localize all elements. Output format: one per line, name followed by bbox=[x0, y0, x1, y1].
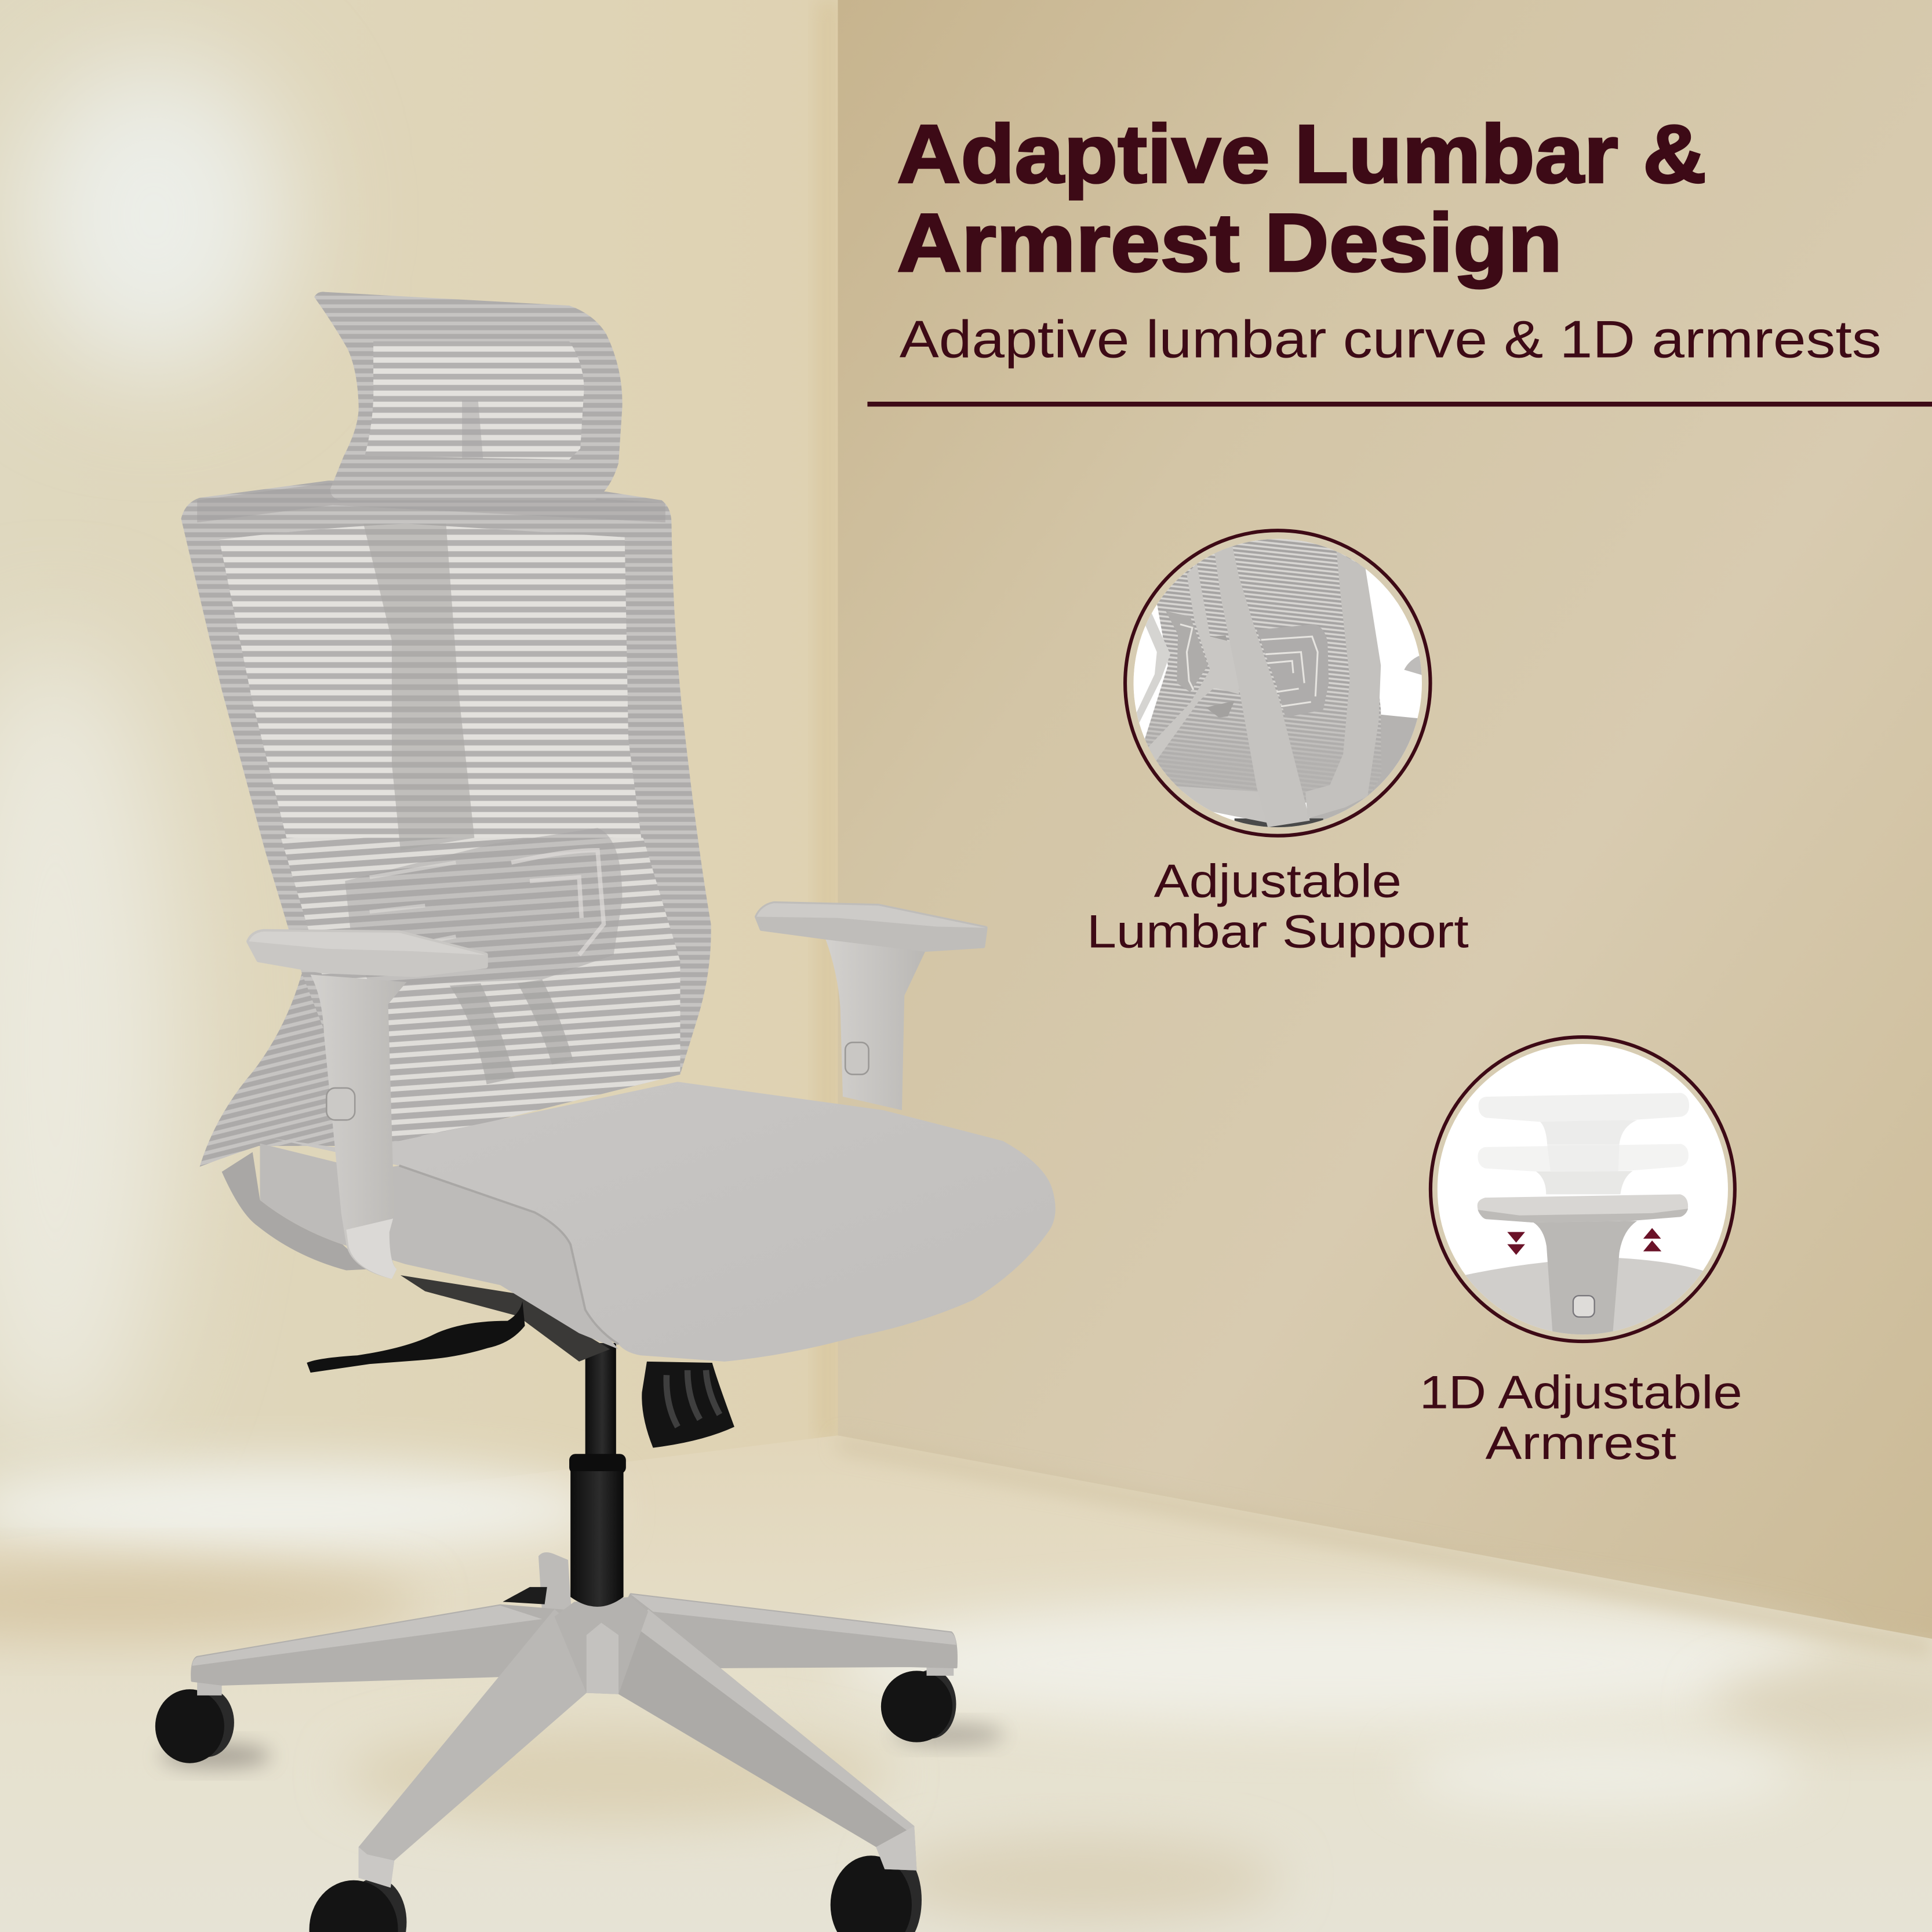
middle position bbox=[1478, 1144, 1689, 1171]
seat back shell bbox=[222, 1152, 370, 1271]
adjust button bbox=[1573, 1296, 1595, 1317]
subheading: Adaptive lumbar curve & 1D armrests bbox=[900, 310, 1882, 369]
feature: 1D adjustable armrest bbox=[1420, 1037, 1742, 1469]
label bbox=[1420, 1367, 1742, 1469]
armrest button bbox=[845, 1042, 869, 1075]
lumbar support plate bbox=[345, 828, 622, 986]
heading: Adaptive Lumbar & bbox=[897, 108, 1707, 201]
label: 1D Adjustable bbox=[1420, 1367, 1742, 1419]
bottom position bbox=[1478, 1194, 1688, 1222]
label: Adjustable bbox=[1154, 855, 1402, 907]
lumbar plate right bbox=[1257, 624, 1329, 718]
left armrest bbox=[249, 932, 486, 1279]
feature: adjustable lumbar support bbox=[1087, 530, 1469, 958]
label: Lumbar Support bbox=[1087, 906, 1469, 958]
armrest button bbox=[326, 1088, 355, 1120]
product: office chair bbox=[155, 292, 1056, 1932]
arrows: down bbox=[1507, 1232, 1525, 1255]
chair base: back leg and casters bbox=[155, 1552, 956, 1932]
tension knob bbox=[642, 1362, 734, 1448]
circular detail: armrest height travel bbox=[1431, 1037, 1741, 1353]
heading: Armrest Design bbox=[897, 197, 1562, 289]
label: Armrest bbox=[1485, 1417, 1676, 1469]
right armrest bbox=[756, 903, 986, 1110]
lumbar plate left bbox=[1166, 611, 1208, 692]
seat mechanism and tilt lever bbox=[307, 1275, 610, 1373]
arrows: up bbox=[1643, 1228, 1661, 1251]
seat cushion bbox=[260, 1082, 1056, 1362]
post bbox=[1533, 1221, 1637, 1335]
heading bbox=[897, 108, 1707, 289]
backrest spine bbox=[363, 523, 474, 850]
lumbar legs bbox=[450, 980, 573, 1085]
heading divider bbox=[867, 402, 1932, 406]
mesh backrest bbox=[173, 474, 727, 1167]
mesh headrest bbox=[314, 292, 623, 500]
gas lift column bbox=[569, 1343, 626, 1607]
seat bbox=[1453, 1258, 1719, 1353]
top position bbox=[1540, 1120, 1637, 1144]
chair base: five-star legs bbox=[192, 1595, 956, 1887]
label bbox=[1087, 855, 1469, 958]
circular detail: lumbar mechanism bbox=[1123, 530, 1434, 843]
